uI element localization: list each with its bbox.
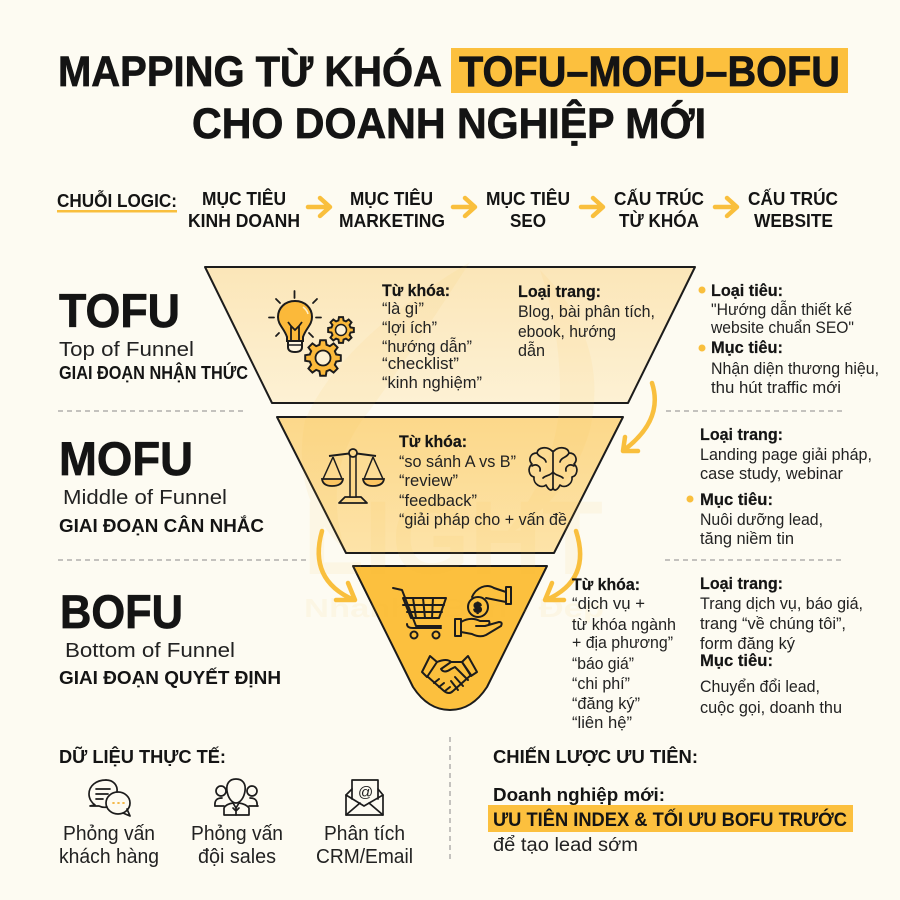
arrow: [308, 198, 330, 216]
title highlight: [451, 48, 848, 93]
tofu side notes: thu hút traffic mới: [711, 379, 841, 397]
bofu heading: [59, 585, 281, 688]
icon: team: [215, 779, 258, 815]
label: Phỏng vấn: [191, 823, 283, 845]
label: Phân tích: [324, 823, 405, 845]
icon: chat bubbles: [89, 780, 130, 816]
label: CRM/Email: [316, 846, 413, 868]
icon: hand giving coin: $: [474, 600, 482, 615]
bofu keywords: “chi phí”: [572, 675, 630, 693]
bullet: [698, 344, 706, 352]
step: marketing goal: MARKETING: [339, 210, 445, 231]
funnel layer: mofu: [277, 417, 623, 553]
tofu side notes: Nhận diện thương hiệu,: [711, 360, 879, 378]
bofu keywords: [572, 576, 676, 732]
arrow: tofu to mofu: [623, 383, 655, 451]
watermark: [302, 262, 604, 623]
subheading: Doanh nghiệp mới:: [493, 784, 665, 805]
tofu keywords: “hướng dẫn”: [382, 337, 472, 356]
funnel layer: bofu: [353, 566, 547, 710]
step: seo goal: MỤC TIÊU: [486, 188, 570, 209]
divider lines: [58, 411, 845, 863]
bofu side notes: [700, 575, 863, 717]
step: marketing goal: MỤC TIÊU: [350, 188, 433, 209]
icon: scales: [322, 449, 384, 503]
arrow: [715, 198, 737, 216]
icon: email: @: [358, 784, 373, 801]
label: [316, 823, 413, 868]
highlight: [488, 805, 853, 832]
tofu page types: [518, 283, 655, 360]
icon: hand giving coin: [455, 586, 511, 636]
label: đội sales: [198, 846, 276, 868]
mofu keywords: [399, 433, 567, 529]
mofu side notes: Loại trang:: [700, 426, 783, 444]
bofu heading: BOFU: [60, 585, 183, 638]
bofu keywords: “báo giá”: [572, 655, 634, 673]
step: keyword structure: [614, 188, 704, 231]
section heading: DỮ LIỆU THỰC TẾ:: [59, 746, 226, 767]
priority strategy section: [488, 746, 853, 856]
bofu keywords: “liên hệ”: [572, 714, 632, 732]
funnel layer: tofu: [205, 267, 695, 403]
tofu side notes: [698, 282, 879, 397]
bofu keywords: từ khóa ngành: [572, 616, 676, 634]
real data section: [59, 746, 413, 868]
label: [191, 823, 283, 868]
closing line: để tạo lead sớm: [493, 835, 638, 856]
icon: brain: [529, 448, 577, 490]
step: business goal: MỤC TIÊU: [202, 188, 286, 209]
watermark: Nhanh - Bền - Đẹp: [304, 593, 604, 623]
section heading: CHIẾN LƯỢC ƯU TIÊN:: [493, 746, 698, 767]
tofu keywords: “kinh nghiệm”: [382, 374, 482, 392]
tofu keywords: Từ khóa:: [382, 282, 450, 300]
title: MAPPING TỪ KHÓA: [58, 47, 442, 96]
tofu page types: Blog, bài phân tích,: [518, 303, 655, 321]
mofu side notes: case study, webinar: [700, 465, 843, 483]
bofu keywords: “đăng ký”: [572, 695, 640, 713]
mofu side notes: [686, 426, 872, 548]
step: marketing goal: [339, 188, 445, 231]
tofu keywords: [382, 282, 482, 392]
mofu heading: Middle of Funnel: [63, 487, 227, 509]
tofu side notes: "Hướng dẫn thiết kế: [711, 300, 852, 319]
title: [58, 47, 848, 148]
tofu page types: dẫn: [518, 341, 545, 360]
tofu heading: [59, 284, 248, 383]
mofu side notes: Nuôi dưỡng lead,: [700, 511, 823, 529]
arrow: mofu to bofu right: [545, 531, 580, 600]
icon: light bulb: [269, 291, 321, 352]
mofu keywords: “giải pháp cho + vấn đề: [399, 511, 567, 529]
tofu heading: TOFU: [59, 284, 180, 337]
bofu side notes: trang “về chúng tôi”,: [700, 615, 846, 633]
step: business goal: KINH DOANH: [188, 210, 300, 231]
tofu heading: Top of Funnel: [59, 339, 194, 361]
bofu side notes: Chuyển đổi lead,: [700, 678, 820, 696]
mofu side notes: Landing page giải pháp,: [700, 446, 872, 464]
arrow: [581, 198, 603, 216]
tofu keywords: “lợi ích”: [382, 319, 437, 337]
mofu keywords: “feedback”: [399, 492, 477, 510]
watermark: LIGHT: [303, 480, 603, 597]
priority statement: ƯU TIÊN INDEX & TỐI ƯU BOFU TRƯỚC: [493, 809, 847, 831]
step: website structure: WEBSITE: [754, 210, 833, 231]
step: keyword structure: CẤU TRÚC: [614, 188, 704, 209]
mofu side notes: tăng niềm tin: [700, 530, 794, 548]
label: khách hàng: [59, 846, 159, 868]
bofu keywords: Từ khóa:: [572, 576, 640, 594]
icon: large gear: [305, 340, 341, 376]
bofu side notes: Trang dịch vụ, báo giá,: [700, 595, 863, 613]
tofu side notes: Mục tiêu:: [711, 339, 783, 357]
bullet: [686, 496, 694, 502]
arrow: [453, 198, 475, 216]
step: seo goal: [486, 188, 570, 231]
title: TOFU–MOFU–BOFU: [459, 48, 840, 96]
mofu heading: [59, 432, 264, 536]
bofu side notes: Mục tiêu:: [700, 652, 773, 670]
tofu page types: ebook, hướng: [518, 323, 616, 341]
mofu keywords: “so sánh A vs B”: [399, 453, 516, 471]
mofu heading: MOFU: [59, 432, 193, 485]
tofu side notes: Loại tiêu:: [711, 282, 783, 300]
bofu heading: GIAI ĐOẠN QUYẾT ĐỊNH: [59, 667, 281, 688]
tofu keywords: “checklist”: [382, 355, 459, 373]
tofu heading: GIAI ĐOẠN NHẬN THỨC: [59, 362, 248, 383]
chain label: CHUỖI LOGIC:: [57, 190, 177, 211]
step: keyword structure: TỪ KHÓA: [619, 210, 699, 231]
mofu heading: GIAI ĐOẠN CÂN NHẮC: [59, 515, 264, 536]
bofu keywords: + địa phương”: [572, 634, 673, 652]
tofu side notes: website chuẩn SEO": [710, 319, 854, 337]
label: Phỏng vấn: [63, 823, 155, 845]
bofu keywords: “dịch vụ +: [572, 595, 645, 613]
title: CHO DOANH NGHIỆP MỚI: [192, 99, 706, 148]
mofu keywords: “review”: [399, 472, 458, 490]
bullet: [698, 286, 706, 294]
step: website structure: [748, 188, 838, 231]
mofu side notes: Mục tiêu:: [700, 491, 773, 509]
icon: small gear: [328, 317, 354, 343]
step: website structure: CẤU TRÚC: [748, 188, 838, 209]
arrow: mofu to bofu left: [319, 531, 355, 600]
step: business goal: [188, 188, 300, 231]
tofu page types: Loại trang:: [518, 283, 601, 301]
bofu side notes: Loại trang:: [700, 575, 783, 593]
step: seo goal: SEO: [510, 210, 546, 231]
logic chain: [57, 188, 838, 231]
icon: shopping cart: [393, 588, 446, 638]
label: [59, 823, 159, 868]
icon: email: [346, 780, 383, 815]
bofu side notes: cuộc gọi, doanh thu: [700, 699, 842, 717]
mofu keywords: Từ khóa:: [399, 433, 467, 451]
bofu side notes: form đăng ký: [700, 635, 796, 653]
bofu heading: Bottom of Funnel: [65, 640, 235, 662]
tofu keywords: “là gì”: [382, 300, 424, 318]
icon: handshake: [422, 656, 477, 693]
